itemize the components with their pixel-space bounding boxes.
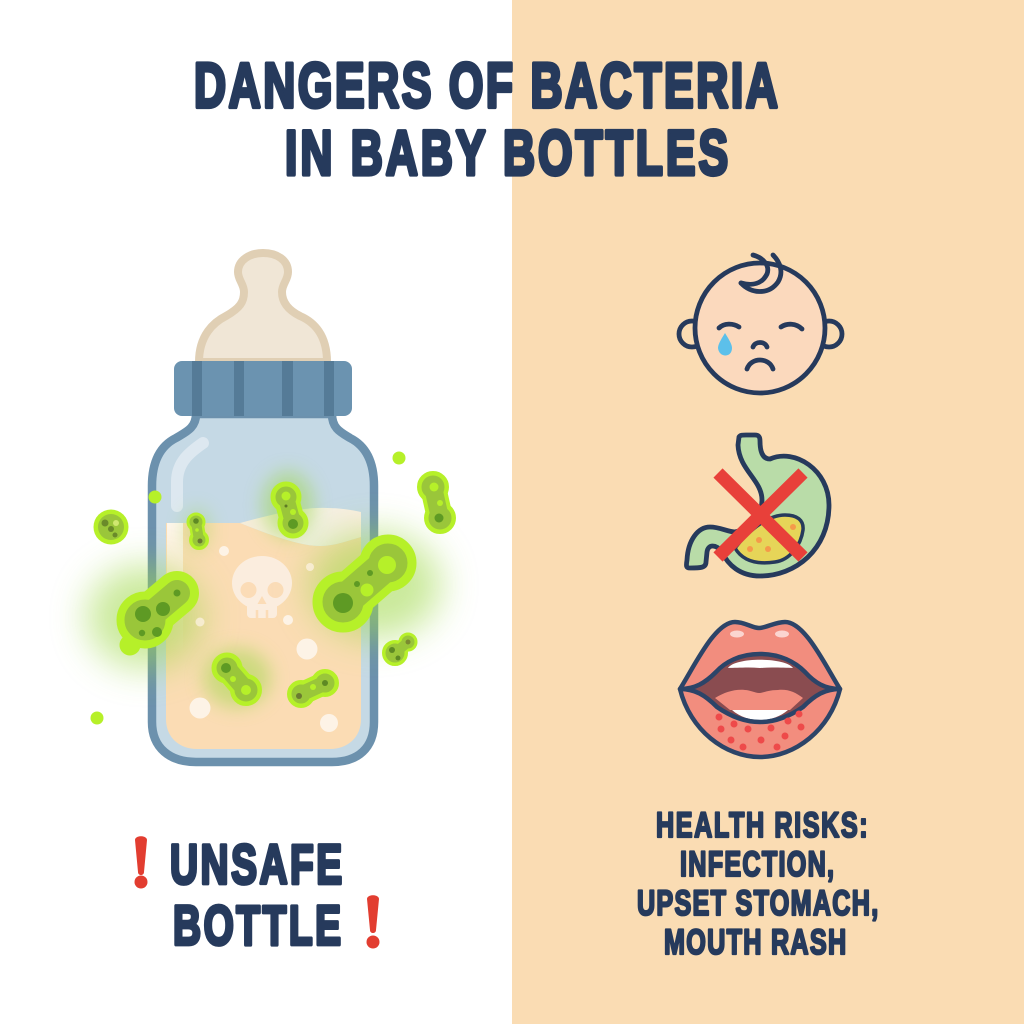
cap — [174, 361, 352, 416]
label: unsafe bottle — [134, 835, 380, 957]
icon: mouth with rash — [680, 622, 840, 757]
nipple — [199, 253, 327, 362]
bubbles — [190, 546, 338, 732]
milk side highlight — [167, 523, 183, 653]
glows — [87, 471, 441, 708]
icon: stomach with red X — [686, 435, 829, 576]
text: health risks: HEALTH RISKS: — [656, 806, 868, 845]
bacterium: top middle — [271, 482, 308, 538]
glass highlight — [177, 443, 203, 506]
text: health risks: MOUTH RASH — [664, 923, 846, 962]
title — [194, 49, 778, 188]
icon: crying baby face — [679, 255, 842, 393]
bacterium: bottom right — [288, 670, 338, 708]
text: health risks: UPSET STOMACH, — [637, 884, 878, 923]
bacterium: large right — [313, 535, 416, 632]
bottle body — [152, 414, 374, 762]
label: unsafe bottle: BOTTLE — [173, 896, 341, 957]
icon: exclamation right — [366, 895, 380, 948]
loose spores — [90, 452, 406, 724]
skull — [232, 556, 292, 618]
bacterium: small in bottle — [187, 513, 208, 550]
bacterium: right low — [382, 633, 417, 666]
panel: right background — [512, 0, 1024, 1024]
title: IN BABY BOTTLES — [285, 117, 728, 188]
text: health risks — [637, 806, 878, 962]
cap ribs — [192, 361, 334, 416]
icon: exclamation left — [134, 836, 148, 888]
label: unsafe bottle: UNSAFE — [170, 835, 342, 896]
text: health risks: INFECTION, — [680, 845, 834, 884]
panel: left background — [0, 0, 512, 1024]
bacterium: far right — [418, 472, 456, 534]
bacterium: large left — [117, 572, 198, 655]
milk — [166, 523, 361, 749]
illustration: baby bottle with bacteria — [87, 253, 456, 762]
bacterium: bottom middle — [212, 653, 262, 706]
milk surface highlight — [240, 508, 361, 546]
title: DANGERS OF BACTERIA — [194, 49, 778, 121]
bacterium: round left — [94, 510, 128, 544]
